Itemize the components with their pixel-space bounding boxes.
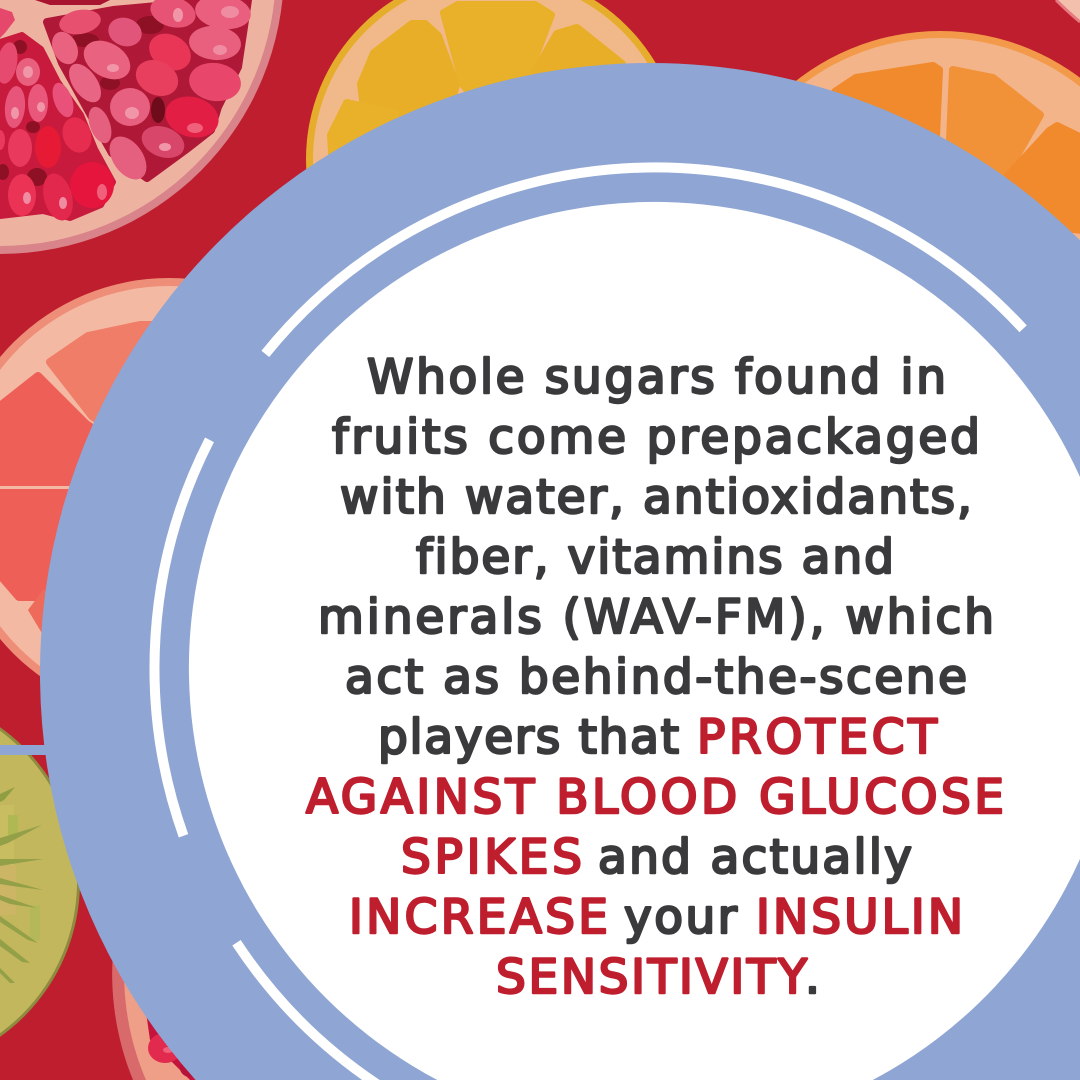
- blue bar at left edge: [0, 745, 60, 755]
- icon: grapefruit slice left: [0, 278, 389, 718]
- body text: SPIKES: [401, 830, 582, 885]
- icon: lemon slice top centre: [306, 0, 682, 347]
- body text: PROTECT: [697, 710, 937, 765]
- body text: act as behind-the-scene: [345, 650, 967, 705]
- icon: orange slice top right: [707, 31, 1080, 497]
- white ring arcs: [154, 167, 1023, 1080]
- body text: fruits come prepackaged: [332, 410, 980, 465]
- icon: kiwi slice left: [0, 727, 80, 1037]
- white circle panel: [189, 202, 1080, 1080]
- body text: fiber, vitamins and: [416, 530, 894, 585]
- icon: pomegranate slice top left: [0, 0, 284, 254]
- icon: citrus rim top right corner: [1056, 0, 1080, 22]
- icon: pomegranate slice bottom: [112, 694, 392, 1080]
- body text: SENSITIVITY: [496, 950, 807, 1005]
- body text: your: [624, 890, 738, 945]
- body text: minerals (WAV-FM), which: [318, 590, 994, 645]
- body text: .: [805, 950, 820, 1005]
- body text: AGAINST BLOOD GLUCOSE: [306, 770, 1004, 825]
- arils right segment: [47, 0, 253, 186]
- body text: players that: [378, 710, 679, 765]
- body text: Whole sugars found in: [367, 350, 946, 405]
- arils left segment: [0, 41, 114, 224]
- body text: and actually: [598, 830, 912, 885]
- body text: with water, antioxidants,: [340, 470, 972, 525]
- body text: INCREASE: [349, 890, 608, 945]
- body text: [306, 350, 1004, 1005]
- body text: INSULIN: [756, 890, 963, 945]
